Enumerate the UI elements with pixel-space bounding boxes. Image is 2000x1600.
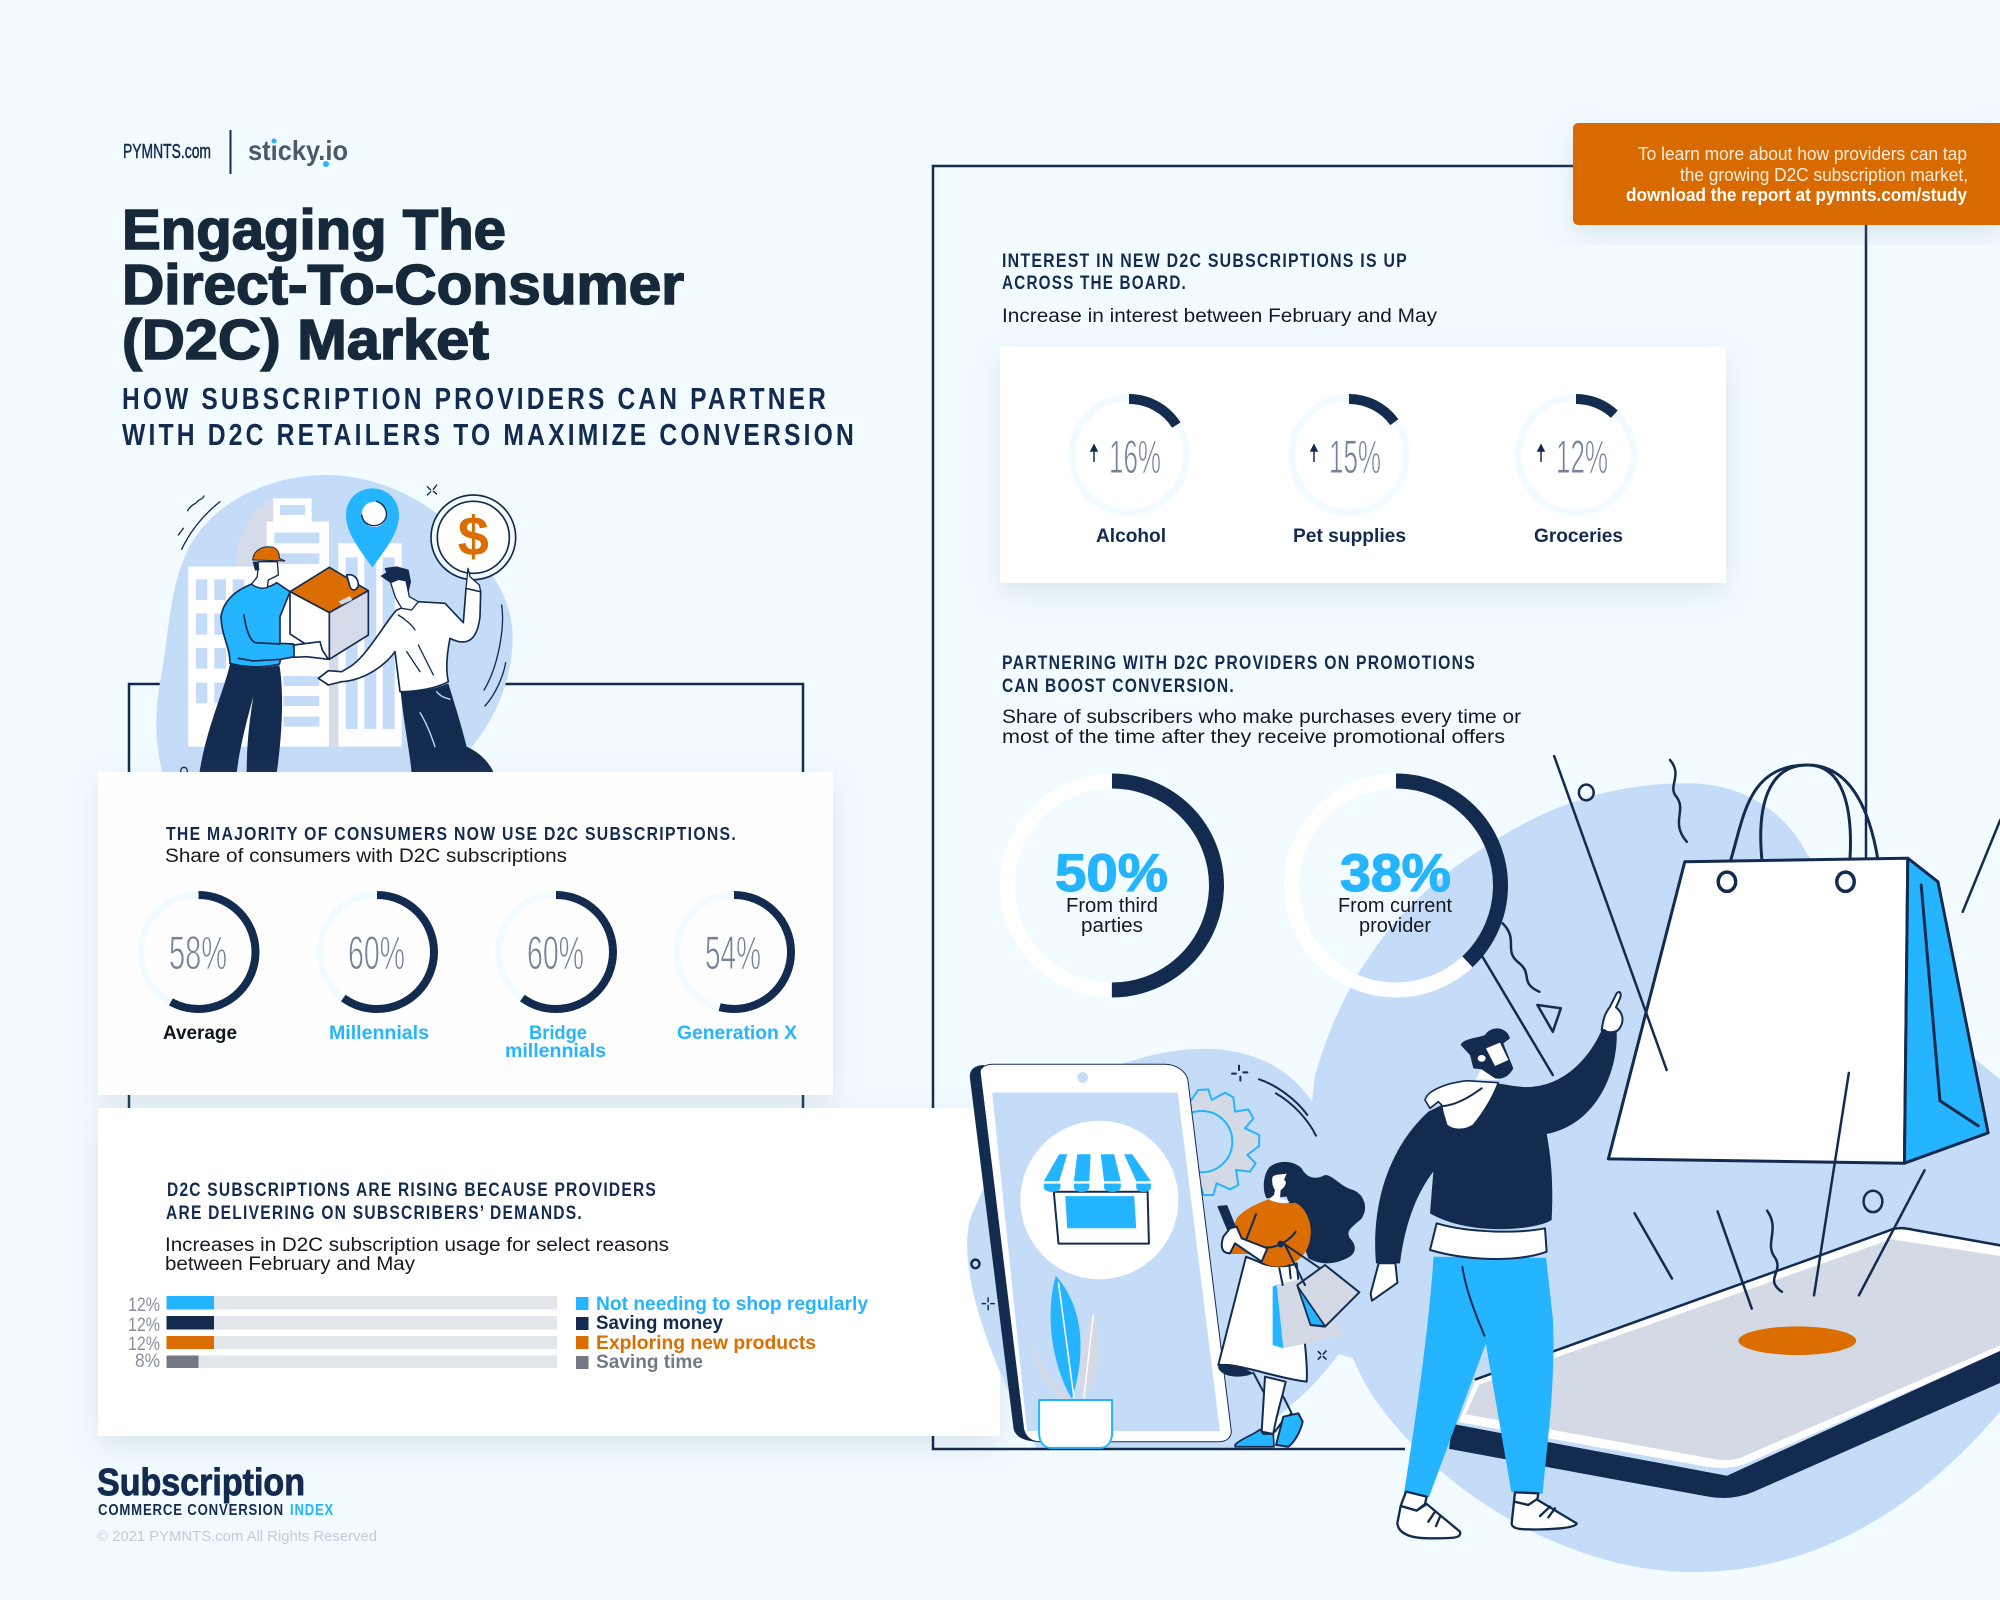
subheading: share of subscribers: Share of subscribers who make purchases every time or [1002, 707, 1522, 728]
ring chart: alcohol 16%: Alcohol [1096, 526, 1166, 547]
footer brand: Subscription Commerce Conversion Index: COMMERCE CONVERSION [98, 1502, 284, 1519]
ring chart: bridge millennials 60%: millennials [505, 1041, 606, 1062]
logos: PYMNTS and sticky.io: sticky.io [248, 135, 348, 166]
title [122, 198, 684, 372]
legend: Saving money [596, 1313, 723, 1334]
legend: Not needing to shop regularly [596, 1294, 868, 1315]
bar chart: 12% [128, 1315, 160, 1336]
logos: PYMNTS and sticky.io [123, 130, 348, 174]
ring chart: 38% from current provider: 38% [1340, 844, 1451, 903]
ring chart: millennials 60%: Millennials [329, 1023, 429, 1044]
buildings [188, 498, 402, 747]
subheading: share of subscribers: most of the time after they receive promotional offers [1002, 727, 1505, 748]
person: woman with bags [1218, 1162, 1365, 1447]
left frame outline [129, 684, 803, 1108]
heading: partnering on promotions: PARTNERING WITH D2C PROVIDERS ON PROMOTIONS [1002, 653, 1476, 674]
callout: download the report: the growing D2C subscription market, [1680, 165, 1968, 185]
person: customer [318, 567, 494, 773]
callout: download the report: download the report at pymnts.com/study [1626, 185, 1967, 205]
title: Engaging The [122, 198, 506, 262]
right frame outline [933, 166, 1866, 1449]
heading: interest in new subscriptions: ACROSS THE BOARD. [1002, 273, 1187, 294]
panel: rising subscriptions [98, 1108, 1000, 1436]
ring chart: average 58%: 58% [169, 926, 227, 979]
ring chart: 50% from third parties: parties [1081, 915, 1143, 937]
person: courier [199, 547, 295, 773]
ring chart: generation X 54%: 54% [705, 926, 761, 979]
ring chart: 50% from third parties: 50% [1055, 844, 1168, 903]
legend: Exploring new products [596, 1333, 816, 1354]
heading: interest in new subscriptions [1002, 251, 1408, 294]
ring chart: pet supplies 15%: Pet supplies [1293, 526, 1406, 547]
subheading: share of consumers: Share of consumers with D2C subscriptions [165, 846, 567, 867]
motion lines and shapes [971, 756, 2000, 1310]
ring chart: millennials 60%: 60% [348, 926, 405, 979]
legend [576, 1294, 868, 1373]
ring chart: groceries 12%: 12% [1556, 430, 1608, 483]
heading: rising: ARE DELIVERING ON SUBSCRIBERS’ DEMANDS. [166, 1203, 583, 1224]
ring chart: millennials 60% [320, 894, 434, 1044]
heading: partnering on promotions [1002, 653, 1476, 697]
ring chart: average 58%: Average [163, 1023, 237, 1044]
icon: dollar coin: $ [458, 504, 489, 567]
ring chart: bridge millennials 60%: Bridge [529, 1023, 587, 1044]
subtitle: WITH D2C RETAILERS TO MAXIMIZE CONVERSION [122, 417, 857, 452]
subheading: increase in interest: Increase in interest between February and May [1002, 306, 1438, 327]
ring chart: 38% from current provider: provider [1359, 915, 1431, 937]
person: man reaching for bag [1371, 992, 1623, 1538]
ring chart: 38% from current provider [1248, 738, 1544, 1033]
bar chart: 8% [135, 1351, 160, 1372]
illustration: delivery handoff in the city [156, 475, 516, 775]
subheading: increases: between February and May [165, 1254, 416, 1275]
subheading: increases: Increases in D2C subscription usage for select reasons [165, 1235, 669, 1256]
icon: potted plant [1030, 1276, 1112, 1448]
icon: gear and sparkle [1171, 1066, 1316, 1195]
bar chart: 12% [128, 1334, 160, 1355]
ring chart: pet supplies 15% [1292, 398, 1406, 547]
panel: interest rings [1000, 347, 1726, 583]
title: (D2C) Market [122, 308, 489, 372]
blob background [156, 475, 513, 775]
heading: partnering on promotions: CAN BOOST CONVERSION. [1002, 676, 1235, 697]
panel: majority of consumers [98, 772, 833, 1095]
ring chart: bridge millennials 60% [498, 894, 614, 1062]
shoes [1397, 1492, 1577, 1538]
subheading: increases [165, 1235, 669, 1275]
ring chart: 38% from current provider: From current [1338, 895, 1452, 917]
title: Direct-To-Consumer [122, 253, 684, 317]
legend: Saving time [596, 1352, 703, 1373]
icon: location pin [346, 488, 399, 567]
illustration: tablet, bag and phone storefront [970, 756, 2000, 1498]
phone storefront [970, 1064, 1231, 1448]
subtitle [122, 381, 857, 452]
icon: store [1044, 1154, 1151, 1244]
subheading: share of subscribers [1002, 707, 1522, 748]
ring chart: average 58% [141, 894, 256, 1044]
callout: download the report: To learn more about how providers can tap [1638, 144, 1967, 164]
bar chart [128, 1295, 557, 1372]
ring chart: pet supplies 15%: 15% [1329, 430, 1381, 483]
ring chart: bridge millennials 60%: 60% [527, 926, 584, 979]
torso, head and raised arm [1375, 992, 1623, 1263]
heading: rising [166, 1180, 657, 1224]
callout: download the report [1573, 123, 2000, 225]
ring chart: generation X 54% [676, 894, 797, 1044]
heading: interest in new subscriptions: INTEREST IN NEW D2C SUBSCRIPTIONS IS UP [1002, 251, 1408, 272]
ring chart: alcohol 16% [1072, 398, 1186, 547]
heading: rising: D2C SUBSCRIPTIONS ARE RISING BECAUSE PROVIDERS [167, 1180, 657, 1201]
icon: dollar coin [431, 495, 516, 580]
ring chart: 50% from third parties: From third [1066, 895, 1158, 917]
blob backgrounds behind right illustration [967, 783, 2000, 1572]
icon: parcel box [290, 567, 368, 659]
copyright: © 2021 PYMNTS.com All Rights Reserved [97, 1528, 377, 1545]
tablet on the ground [1449, 1228, 2000, 1498]
subtitle: HOW SUBSCRIPTION PROVIDERS CAN PARTNER [122, 381, 829, 416]
ring chart: groceries 12%: Groceries [1534, 526, 1623, 547]
ring chart: 50% from third parties [1008, 781, 1216, 990]
ring chart: generation X 54%: Generation X [677, 1023, 797, 1044]
shopping bag [1608, 765, 1988, 1163]
ring chart: alcohol 16%: 16% [1109, 430, 1161, 483]
legs and left hand [1371, 1257, 1553, 1497]
motion strokes and sparkles [178, 485, 506, 774]
bar chart: 12% [128, 1295, 160, 1316]
ring chart: groceries 12% [1518, 398, 1634, 547]
footer brand: Subscription Commerce Conversion Index: INDEX [290, 1502, 334, 1519]
heading: majority: THE MAJORITY OF CONSUMERS NOW USE D2C SUBSCRIPTIONS. [166, 823, 737, 844]
footer brand: Subscription Commerce Conversion Index: Subscription [97, 1462, 305, 1504]
logos: PYMNTS and sticky.io: PYMNTS.com [123, 141, 211, 163]
